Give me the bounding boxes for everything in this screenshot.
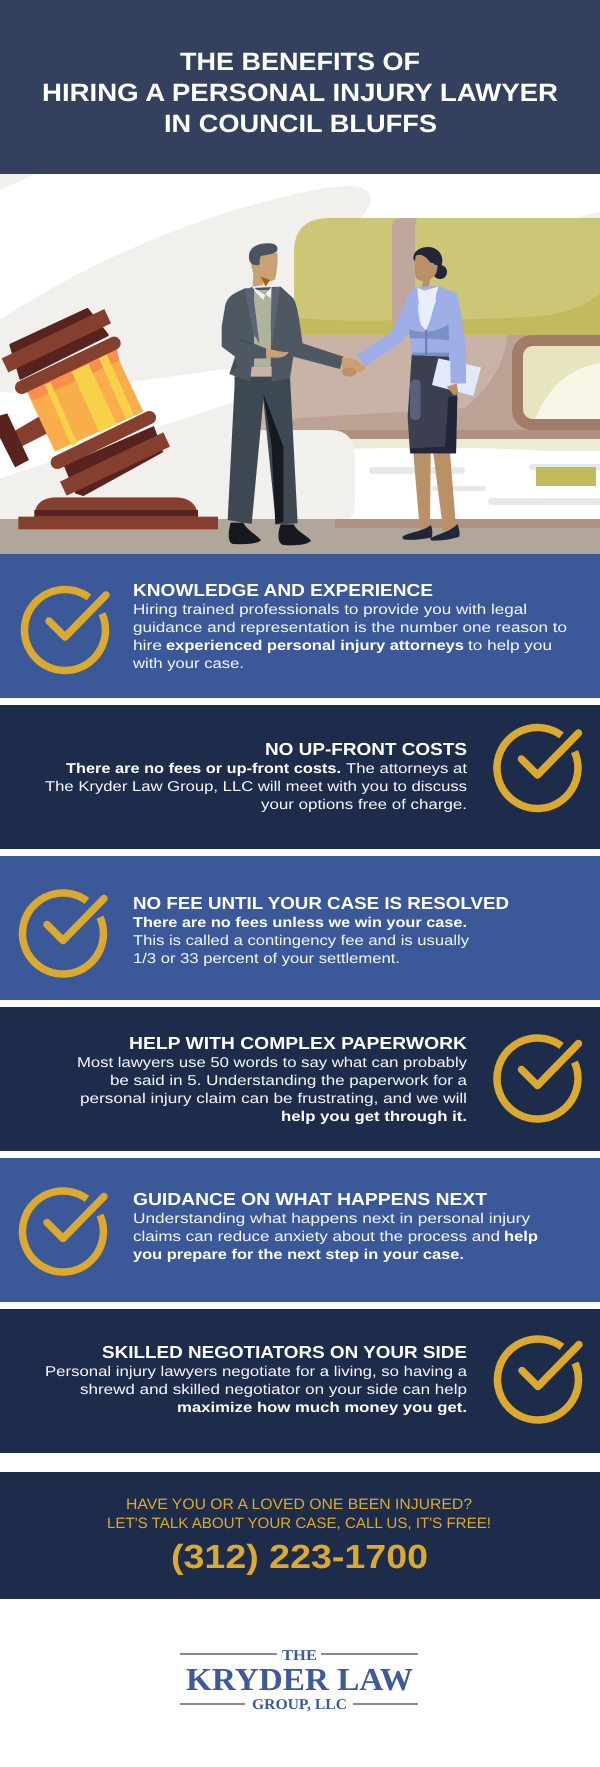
logo: The Kryder Law Group: THE (282, 1648, 317, 1664)
icon: check circle (22, 1191, 104, 1272)
text block: Personal injury lawyers negotiate for a living, so having a (45, 1364, 467, 1380)
title: HIRING A PERSONAL INJURY LAWYER (42, 79, 558, 107)
man (222, 243, 343, 545)
heading: SKILLED NEGOTIATORS ON YOUR SIDE (102, 1342, 467, 1362)
vehicle (230, 218, 600, 528)
text block: 1/3 or 33 percent of your settlement. (133, 951, 400, 967)
logo: The Kryder Law Group (180, 1648, 418, 1713)
text block (45, 761, 467, 813)
text block (45, 1364, 467, 1416)
panel: skilled negotiators (0, 1309, 600, 1453)
text block (133, 1211, 538, 1263)
title (42, 48, 558, 138)
title: THE BENEFITS OF (180, 48, 420, 76)
heading: NO UP-FRONT COSTS (265, 739, 467, 759)
background swooshes (0, 174, 600, 519)
floor (0, 519, 600, 554)
call to action text: HAVE YOU OR A LOVED ONE BEEN INJURED? (126, 1496, 472, 1513)
heading: GUIDANCE ON WHAT HAPPENS NEXT (133, 1189, 487, 1209)
text block: help (504, 1229, 538, 1245)
heading: NO FEE UNTIL YOUR CASE IS RESOLVED (133, 893, 509, 913)
text block: guidance and representation is the number one reason to (133, 620, 567, 636)
text block (132, 602, 567, 672)
logo: The Kryder Law Group: KRYDER LAW (186, 1661, 413, 1697)
text block: you prepare for the next step in your case. (133, 1247, 464, 1263)
illustration: handshake with gavel and vehicle (0, 174, 600, 554)
text block: shrewd and skilled negotiator on your side can help (80, 1382, 467, 1398)
text block: There are no fees unless we win your case. (133, 915, 467, 931)
text block: This is called a contingency fee and is usually (133, 933, 470, 949)
text block: Understanding what happens next in personal injury (133, 1211, 531, 1227)
text block: with your case. (132, 656, 244, 672)
text block: your options free of charge. (261, 797, 467, 813)
icon: check circle (22, 893, 104, 974)
woman (342, 247, 481, 541)
panel: help with complex paperwork (0, 1007, 600, 1151)
text block: Hiring trained professionals to provide you with legal (133, 602, 527, 618)
text block: be said in 5. Understanding the paperwork for a (110, 1073, 467, 1089)
text block: Most lawyers use 50 words to say what can probably (77, 1055, 468, 1071)
text block: maximize how much money you get. (177, 1400, 467, 1416)
panel: knowledge and experience (0, 554, 600, 698)
text block: help you get through it. (281, 1109, 467, 1125)
panel: no up-front costs (0, 705, 600, 849)
gavel (0, 309, 218, 529)
text block: The attorneys at (346, 761, 467, 777)
heading: HELP WITH COMPLEX PAPERWORK (129, 1033, 467, 1053)
panel: header (0, 0, 600, 174)
text block: There are no fees or up-front costs. (66, 761, 341, 777)
icon: check circle (497, 728, 578, 809)
phone number: (312) 223-1700 (171, 1539, 428, 1576)
icon: check circle (497, 1339, 579, 1420)
icon: check circle (24, 590, 106, 671)
text block (77, 1055, 468, 1125)
text block: personal injury claim can be frustrating, and we will (80, 1091, 467, 1107)
panel: no fee until resolved (0, 856, 600, 1000)
call to action text: LET'S TALK ABOUT YOUR CASE, CALL US, IT'S FREE! (107, 1515, 491, 1532)
text block (133, 915, 470, 967)
text block: experienced personal injury attorneys (166, 638, 464, 654)
icon: check circle (497, 1038, 578, 1119)
panel: call to action (0, 1472, 600, 1599)
call to action text (107, 1496, 491, 1532)
text block: The Kryder Law Group, LLC will meet with you to discuss (45, 779, 467, 795)
heading: KNOWLEDGE AND EXPERIENCE (133, 580, 433, 600)
panel: guidance on what happens next (0, 1158, 600, 1302)
logo: The Kryder Law Group: GROUP, LLC (252, 1697, 347, 1713)
text block: hire (133, 638, 162, 654)
title: IN COUNCIL BLUFFS (164, 110, 437, 138)
text block: to help you (468, 638, 552, 654)
text block: claims can reduce anxiety about the process and (133, 1229, 500, 1245)
